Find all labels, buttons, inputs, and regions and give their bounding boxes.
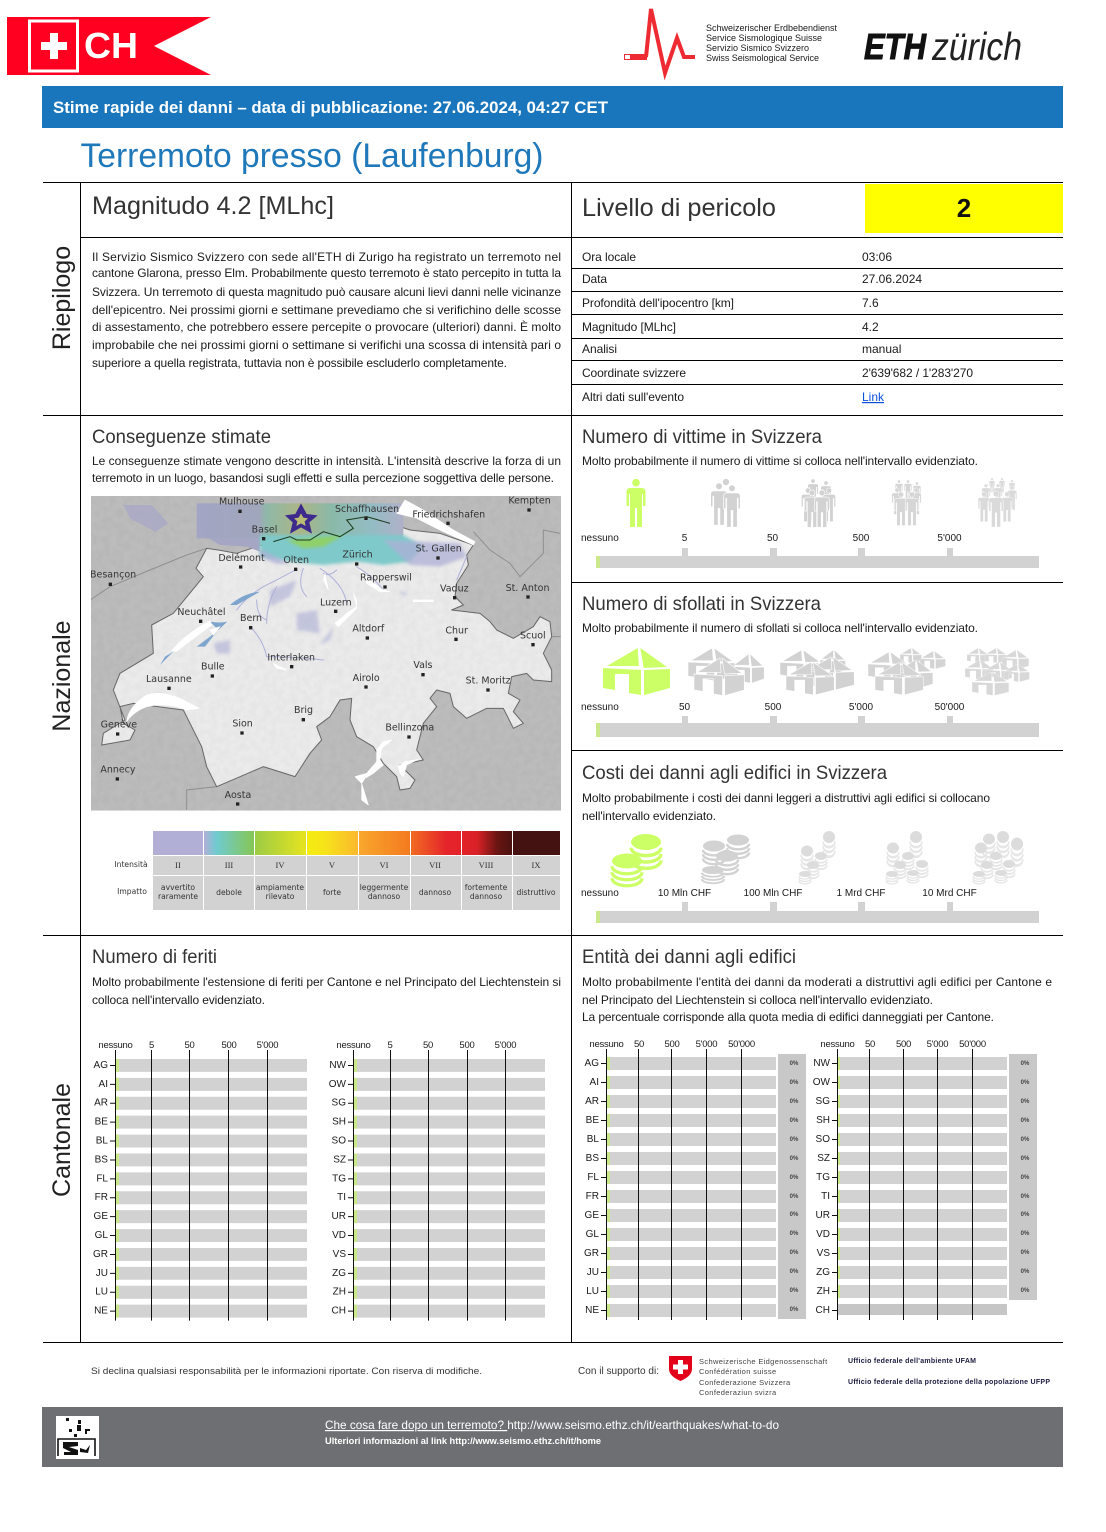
summary text: Il Servizio Sismico Svizzero con sede all'ETH di Zurigo ha registrato un terremoto nel (92, 250, 561, 264)
legend: intensity scale (114, 831, 560, 910)
chart: injured, cantons NW to CH: VS (333, 1249, 346, 1260)
table: event data: Profondità dell'ipocentro [km] (582, 296, 734, 310)
text: costs description: nell'intervallo evidenziato. (582, 809, 716, 823)
header band (42, 86, 1063, 128)
chart: building damage, cantons NW to CH: 0% (1021, 1194, 1030, 1200)
text: federal administration: Confederazione Svizzera (699, 1378, 791, 1387)
icon: one tent highlighted (603, 648, 670, 695)
legend: intensity scale: IV (276, 860, 285, 870)
chart: building damage, cantons AG to NE: 0% (790, 1231, 799, 1237)
text: federal administration (699, 1357, 828, 1397)
chart: building damage, cantons NW to CH: VD (816, 1229, 830, 1240)
city labels: Brig (294, 705, 313, 716)
chart: building damage, cantons AG to NE: nessuno (589, 1039, 624, 1050)
city labels: Olten (283, 555, 309, 566)
epicentre star (285, 503, 318, 534)
legend: intensity scale: Impatto (117, 887, 147, 896)
table: event data: 2'639'682 / 1'283'270 (862, 366, 973, 380)
logo: Swiss Seismological Service: Service Sismologique Suisse (706, 33, 822, 43)
chart: building damage, cantons NW to CH: SO (816, 1134, 830, 1145)
logo: ETH Zurich: zürich (931, 26, 1022, 69)
legend: intensity scale: III (225, 860, 233, 870)
heading: victims: Numero di vittime in Svizzera (582, 426, 822, 448)
chart: injured, cantons NW to CH: ZG (332, 1268, 346, 1279)
chart: building damage, cantons AG to NE: 0% (790, 1288, 799, 1294)
scale labels (581, 533, 962, 544)
footer links (325, 1418, 779, 1447)
heading: building damage: Entità dei danni agli edifici (582, 946, 796, 968)
chart: building damage, cantons NW to CH: 0% (1021, 1118, 1030, 1124)
chart: injured, cantons AG to NE: LU (95, 1287, 108, 1298)
city labels: Aosta (225, 790, 251, 801)
chart: injured, cantons NW to CH: OW (329, 1079, 347, 1090)
chart: injured, cantons NW to CH: 500 (459, 1040, 475, 1051)
chart: building damage, cantons NW to CH: UR (816, 1210, 830, 1221)
panel: injured by canton (92, 946, 561, 1321)
icon: coins 5 (973, 831, 1023, 884)
icon: tents 3 (780, 650, 854, 695)
scale bar (596, 902, 1039, 923)
summary text: di assestamento, che potrebbero essere percepite o provocare (ulteriori) danni. È molto (92, 319, 561, 334)
text: consequences description (92, 454, 561, 485)
legend: intensity scale: leggermente (360, 883, 409, 892)
chart: building damage, cantons AG to NE: FL (587, 1172, 599, 1183)
icon: small group (711, 478, 740, 527)
icon: tents 2 (688, 648, 764, 696)
chart: building damage, cantons NW to CH: ZH (817, 1286, 830, 1297)
icon: coins 2 (702, 834, 749, 883)
chart: building damage, cantons NW to CH: 0% (1021, 1288, 1030, 1294)
legend: intensity scale: raramente (158, 892, 198, 901)
heading: magnitude: Magnitudo 4.2 [MLhc] (92, 192, 334, 220)
chart: building damage, cantons AG to NE: BL (587, 1134, 599, 1145)
chart: building damage, cantons AG to NE: 0% (790, 1118, 799, 1124)
city labels: Besançon (90, 570, 136, 581)
chart: injured, cantons AG to NE: AI (99, 1079, 108, 1090)
table: event data: Analisi (582, 342, 617, 356)
chart: building damage, cantons AG to NE: GE (585, 1210, 599, 1221)
chart: building damage, cantons NW to CH (813, 1039, 1037, 1320)
table: event data: 7.6 (862, 296, 879, 310)
chart: injured, cantons AG to NE: BE (95, 1117, 108, 1128)
city labels: St. Gallen (416, 544, 462, 555)
chart: building damage, cantons NW to CH: 0% (1021, 1061, 1030, 1067)
footer band (42, 1407, 1063, 1467)
chart: building damage, cantons NW to CH: CH (816, 1305, 830, 1316)
city labels: Bern (240, 613, 262, 624)
logo: ETH Zurich (864, 26, 1022, 69)
chart: building damage, cantons AG to NE: BE (586, 1115, 599, 1126)
chart: building damage, cantons NW to CH: TG (816, 1172, 830, 1183)
danger level value (865, 184, 1063, 233)
table: event data: Magnitudo [MLhc] (582, 320, 676, 334)
chart: injured, cantons NW to CH: 5'000 (495, 1040, 516, 1051)
city labels (90, 496, 551, 801)
legend: intensity scale: rilevato (266, 892, 295, 901)
logo: CH flag (7, 17, 211, 75)
table: event data: Data (582, 272, 607, 286)
city labels: Bellinzona (385, 723, 434, 734)
scale labels: 10 Mrd CHF (922, 888, 977, 899)
chart: injured, cantons NW to CH: 50 (423, 1040, 433, 1051)
legend: intensity scale: debole (216, 888, 242, 897)
logo: ETH Zurich: ETH (864, 26, 927, 67)
scale labels: 50 (679, 702, 690, 713)
chart: building damage, cantons NW to CH: 0% (1021, 1099, 1030, 1105)
chart: building damage, cantons AG to NE: FR (586, 1191, 599, 1202)
chart: injured, cantons NW to CH: nessuno (336, 1040, 371, 1051)
heading: costs: Costi dei danni agli edifici in Svizzera (582, 762, 887, 784)
city labels: Chur (445, 625, 468, 636)
chart: building damage, cantons AG to NE: GR (584, 1248, 599, 1259)
chart: building damage, cantons AG to NE: 500 (664, 1039, 680, 1050)
chart: building damage, cantons NW to CH: SH (816, 1115, 830, 1126)
chart: injured, cantons AG to NE: BS (95, 1154, 108, 1165)
chart: injured, cantons AG to NE: GE (94, 1211, 108, 1222)
city labels: Luzern (320, 597, 352, 608)
city labels: Friedrichshafen (412, 509, 485, 520)
title: Terremoto presso (Laufenburg) (80, 137, 544, 175)
city markers (109, 508, 535, 806)
chart: building damage, cantons AG to NE: LU (586, 1286, 599, 1297)
summary text (92, 250, 561, 370)
chart: injured, cantons AG to NE: 500 (221, 1040, 237, 1051)
text: federal offices: Ufficio federale dell'ambiente UFAM (848, 1358, 976, 1365)
chart: injured, cantons NW to CH: SO (332, 1136, 346, 1147)
logo: CH flag: CH (84, 25, 138, 66)
chart: building damage, cantons AG to NE: 0% (790, 1212, 799, 1218)
chart: injured, cantons NW to CH: CH (332, 1306, 346, 1317)
chart: injured, cantons AG to NE: JU (96, 1268, 108, 1279)
panel: danger level (582, 184, 1063, 233)
text: victims description: Molto probabilmente il numero di vittime si colloca nell'intervallo evidenziato. (582, 454, 978, 468)
panel: displaced (581, 593, 1039, 737)
logo: Swiss Seismological Service: Servizio Sismico Svizzero (706, 43, 809, 53)
city labels: Scuol (520, 631, 546, 642)
chart: building damage, cantons NW to CH: 500 (896, 1039, 911, 1050)
chart: injured, cantons AG to NE: BL (96, 1136, 108, 1147)
danger level value: 2 (957, 193, 971, 223)
chart: building damage, cantons AG to NE: 0% (790, 1307, 799, 1313)
scale labels: nessuno (581, 702, 619, 713)
city labels: Kempten (508, 496, 551, 507)
text: costs description (582, 791, 990, 823)
text: federal administration: Confédération suisse (699, 1367, 777, 1376)
legend: intensity scale: VIII (479, 860, 493, 870)
panel: building damage by canton (582, 946, 1052, 1320)
chart: injured, cantons NW to CH: TI (337, 1192, 346, 1203)
table: event data (582, 250, 973, 404)
icon: large group (892, 480, 921, 526)
icon: tents 5 (965, 648, 1029, 696)
chart: injured, cantons NW to CH: ZH (333, 1287, 346, 1298)
text: building damage description: La percentuale corrisponde alla quota media di edifici danneggiati per Cantone. (582, 1010, 994, 1024)
text: consequences description: terremoto in un luogo, basandosi sugli effetti e sulla percezione soggettiva delle persone. (92, 471, 554, 485)
header band: Stime rapide dei danni – data di pubblicazione: 27.06.2024, 04:27 CET (53, 99, 608, 117)
legend: intensity scale: VII (429, 860, 441, 870)
chart: building damage, cantons NW to CH: 50'000 (959, 1039, 986, 1050)
chart: injured, cantons NW to CH: 5 (387, 1040, 393, 1051)
icon: tents 4 (868, 648, 945, 695)
city labels: Delémont (218, 553, 265, 564)
city labels: St. Moritz (466, 676, 511, 687)
text: building damage description: Molto probabilmente l'entità dei danni da moderati a distruttivi agli edifici per Cantone e (582, 975, 1052, 989)
panel: magnitude summary (92, 192, 561, 370)
city labels: St. Anton (506, 583, 549, 594)
footer links: Ulteriori informazioni al link http://www.seismo.ethz.ch/it/home (325, 1436, 601, 1447)
chart: building damage, cantons AG to NE: 0% (790, 1099, 799, 1105)
chart: building damage, cantons AG to NE: 5'000 (696, 1039, 717, 1050)
scale labels: 5'000 (937, 533, 962, 544)
scale bar (596, 548, 1039, 568)
scale labels: 50'000 (935, 702, 965, 713)
lakes (127, 500, 475, 805)
scale labels: 5'000 (849, 702, 874, 713)
panel: estimated consequences (90, 426, 563, 910)
icon: coins 3 (799, 831, 835, 884)
intensity overlay (123, 503, 467, 665)
chart: building damage, cantons NW to CH: SG (816, 1096, 830, 1107)
table: event data: manual (862, 342, 901, 356)
chart: building damage, cantons AG to NE: 0% (790, 1137, 799, 1143)
logo: Swiss Seismological Service: Swiss Seismological Service (706, 53, 819, 63)
scale labels: 50 (767, 533, 778, 544)
chart: building damage, cantons NW to CH: nessuno (820, 1039, 855, 1050)
legend: intensity scale: II (175, 860, 181, 870)
legend: intensity scale: V (329, 860, 336, 870)
chart: injured, cantons AG to NE: 5 (149, 1040, 154, 1051)
legend: intensity scale: forte (323, 888, 341, 897)
chart: building damage, cantons NW to CH: 5'000 (927, 1039, 948, 1050)
legend: intensity scale: Intensità (114, 860, 148, 869)
text: injured description (92, 975, 561, 1007)
heading: injured: Numero di feriti (92, 946, 217, 968)
chart: building damage, cantons NW to CH: 0% (1021, 1137, 1030, 1143)
chart: building damage, cantons NW to CH: 0% (1021, 1269, 1030, 1275)
city labels: Vals (413, 660, 433, 671)
chart: building damage, cantons NW to CH: TI (821, 1191, 830, 1202)
chart: injured, cantons NW to CH: VD (332, 1230, 346, 1241)
text: federal administration: Confederaziun svizra (699, 1388, 777, 1397)
section label: Nazionale: Nazionale (48, 620, 76, 732)
text: injured description: Molto probabilmente l'estensione di feriti per Cantone e nel Principato del Liechtenstein si (92, 975, 561, 989)
chart: building damage, cantons AG to NE: 0% (790, 1156, 799, 1162)
chart: injured, cantons NW to CH: SH (332, 1117, 346, 1128)
icon: coins highlighted (612, 834, 661, 886)
city labels: Interlaken (267, 652, 315, 663)
chart: injured, cantons AG to NE: FL (96, 1173, 108, 1184)
table: event data: Coordinate svizzere (582, 366, 686, 380)
text: federal offices (848, 1358, 1050, 1386)
city labels: Lausanne (146, 674, 192, 685)
chart: building damage, cantons AG to NE: 0% (790, 1250, 799, 1256)
chart: building damage, cantons AG to NE: 50'000 (728, 1039, 755, 1050)
chart: building damage, cantons NW to CH: 0% (1021, 1231, 1030, 1237)
chart: building damage, cantons NW to CH: 0% (1021, 1156, 1030, 1162)
legend: intensity scale: dannoso (470, 892, 503, 901)
border Rhine (273, 517, 390, 542)
scale labels: nessuno (581, 888, 619, 899)
city labels: Mulhouse (219, 497, 265, 508)
icon: Swiss shield (669, 1356, 692, 1381)
chart: building damage, cantons NW to CH: 0% (1021, 1175, 1030, 1181)
chart: building damage, cantons NW to CH: 0% (1021, 1250, 1030, 1256)
chart: injured, cantons NW to CH (329, 1040, 545, 1321)
chart: building damage, cantons AG to NE: NE (585, 1305, 599, 1316)
city labels: Annecy (100, 764, 136, 775)
legend: intensity scale: distruttivo (516, 888, 556, 897)
icon: crowd (978, 478, 1017, 527)
legend: intensity scale: ampiamente (256, 883, 304, 892)
chart: building damage, cantons AG to NE: AR (585, 1096, 599, 1107)
chart: building damage, cantons NW to CH: 0% (1021, 1080, 1030, 1086)
summary text: improbabile che nei prossimi giorni o settimane si verifichi una scossa di intensità pari o (92, 338, 561, 352)
text: building damage description (582, 975, 1052, 1024)
scale labels (581, 702, 965, 713)
city labels: Genève (101, 720, 137, 731)
logo: Swiss Seismological Service (624, 9, 837, 73)
city labels: Altdorf (352, 624, 385, 635)
legend: intensity scale: dannoso (368, 892, 401, 901)
text: federal offices: Ufficio federale della protezione della popolazione UFPP (848, 1379, 1050, 1386)
table: event data: 03:06 (862, 250, 892, 264)
chart: building damage, cantons NW to CH: NW (813, 1058, 831, 1069)
chart: injured, cantons AG to NE: nessuno (98, 1040, 133, 1051)
chart: building damage, cantons AG to NE: 0% (790, 1061, 799, 1067)
chart: injured, cantons AG to NE: GL (95, 1230, 108, 1241)
chart: building damage, cantons AG to NE: 0% (790, 1269, 799, 1275)
map: Switzerland intensity (90, 496, 563, 811)
summary text: cantone Glarona, presso Elm. Probabilmente questo terremoto è stato percepito in tutta la (92, 266, 561, 280)
scale labels: 100 Mln CHF (744, 888, 802, 899)
chart: building damage, cantons NW to CH: VS (817, 1248, 830, 1259)
table: event data: Ora locale (582, 250, 636, 264)
scale labels: nessuno (581, 533, 619, 544)
city labels: Sion (232, 718, 253, 729)
text: federal administration: Schweizerische Eidgenossenschaft (699, 1357, 828, 1366)
support credit: Con il supporto di: (578, 1366, 659, 1377)
chart: injured, cantons AG to NE: 50 (184, 1040, 195, 1051)
chart: injured, cantons AG to NE (93, 1040, 307, 1321)
panel: danger level: Livello di pericolo (582, 194, 776, 222)
chart: building damage, cantons AG to NE (584, 1039, 806, 1320)
heading: consequences: Conseguenze stimate (92, 426, 271, 448)
section label: Cantonale: Cantonale (48, 1083, 76, 1197)
scale labels: 500 (853, 533, 870, 544)
chart: injured, cantons NW to CH: SZ (333, 1154, 346, 1165)
scale labels: 10 Mln CHF (658, 888, 711, 899)
text: building damage description: nel Principato del Liechtenstein si colloca nell'intervallo evidenziato. (582, 993, 933, 1007)
city labels: Basel (252, 525, 277, 536)
chart: building damage, cantons NW to CH: 0% (1021, 1212, 1030, 1218)
scale labels: 5 (682, 533, 688, 544)
scale labels: 500 (765, 702, 782, 713)
chart: building damage, cantons NW to CH: ZG (816, 1267, 830, 1278)
chart: building damage, cantons AG to NE: 0% (790, 1194, 799, 1200)
city labels: Zürich (342, 550, 373, 561)
city labels: Rapperswil (360, 573, 412, 584)
chart: injured, cantons AG to NE: AG (94, 1060, 108, 1071)
footer links: Che cosa fare dopo un terremoto? http://www.seismo.ethz.ch/it/earthquakes/what-to-do (325, 1418, 779, 1432)
summary text: Svizzera. Un terremoto di questa magnitudo può causare alcuni lievi danni nelle vicinanze (92, 285, 561, 299)
chart: injured, cantons AG to NE: NE (94, 1306, 108, 1317)
city labels: Schaffhausen (335, 504, 399, 515)
chart: injured, cantons NW to CH: NW (329, 1060, 347, 1071)
chart: building damage, cantons AG to NE: BS (586, 1153, 599, 1164)
icon: earthquake shelter (56, 1416, 99, 1459)
logo: Swiss Seismological Service: Schweizerischer Erdbebendienst (706, 23, 837, 33)
scale labels (581, 888, 977, 899)
chart: building damage, cantons AG to NE: AG (585, 1058, 599, 1069)
table: event data: 4.2 (862, 320, 879, 334)
text: displaced description: Molto probabilmente il numero di sfollati si colloca nell'intervallo evidenziato. (582, 621, 978, 635)
chart: building damage, cantons AG to NE: 50 (634, 1039, 644, 1050)
icon: coins 4 (886, 831, 928, 884)
chart: injured, cantons AG to NE: 5'000 (257, 1040, 278, 1051)
chart: building damage, cantons AG to NE: AI (590, 1077, 599, 1088)
text: costs description: Molto probabilmente i costi dei danni leggeri a distruttivi agli edifici si collocano (582, 791, 990, 805)
text: injured description: colloca nell'intervallo evidenziato. (92, 993, 265, 1007)
support credit (578, 1356, 1050, 1397)
chart: injured, cantons NW to CH: UR (332, 1211, 346, 1222)
legend: intensity scale: IX (532, 860, 540, 870)
chart: injured, cantons AG to NE: GR (93, 1249, 108, 1260)
chart: injured, cantons NW to CH: TG (332, 1173, 346, 1184)
chart: building damage, cantons AG to NE: 0% (790, 1080, 799, 1086)
summary text: dell'epicentro. Nei prossimi giorni e settimane prevediamo che si verifichino delle scosse (92, 303, 561, 317)
legend: intensity scale: avvertito (161, 883, 195, 892)
scale labels: 1 Mrd CHF (837, 888, 885, 899)
chart: building damage, cantons NW to CH: SZ (817, 1153, 830, 1164)
table: event data: Altri dati sull'evento (582, 390, 684, 404)
heading: displaced: Numero di sfollati in Svizzera (582, 593, 821, 615)
text: consequences description: Le conseguenze stimate vengono descritte in intensità. L'intensità descrive la forza di un (92, 454, 561, 468)
chart: building damage, cantons AG to NE: JU (587, 1267, 599, 1278)
chart: building damage, cantons AG to NE: 0% (790, 1175, 799, 1181)
chart: injured, cantons NW to CH: SG (332, 1098, 346, 1109)
chart: injured, cantons AG to NE: AR (94, 1098, 108, 1109)
city labels: Vaduz (440, 584, 469, 595)
icon: one person highlighted (626, 479, 646, 527)
table: event data: 27.06.2024 (862, 272, 922, 286)
chart: building damage, cantons AG to NE: GL (586, 1229, 599, 1240)
chart: injured, cantons AG to NE: FR (95, 1192, 108, 1203)
section label: Riepilogo: Riepilogo (48, 246, 76, 350)
city labels: Bulle (201, 662, 225, 673)
legend: intensity scale: VI (380, 860, 389, 870)
city labels: Airolo (353, 673, 380, 684)
table: event data: Link (862, 390, 885, 404)
legend: intensity scale: dannoso (419, 888, 452, 897)
city labels: Neuchâtel (177, 607, 226, 618)
summary text: superiore a quella registrata, tuttavia non è possibile escluderlo completamente. (92, 356, 507, 370)
disclaimer: Si declina qualsiasi responsabilità per le informazioni riportate. Con riserva di modifiche. (91, 1366, 482, 1377)
panel: building costs (581, 762, 1039, 923)
chart: building damage, cantons NW to CH: 50 (865, 1039, 875, 1050)
icon: medium group (801, 479, 836, 527)
chart: building damage, cantons NW to CH: OW (813, 1077, 831, 1088)
legend: intensity scale: fortemente (465, 883, 508, 892)
panel: victims (581, 426, 1039, 568)
scale bar (596, 716, 1039, 737)
